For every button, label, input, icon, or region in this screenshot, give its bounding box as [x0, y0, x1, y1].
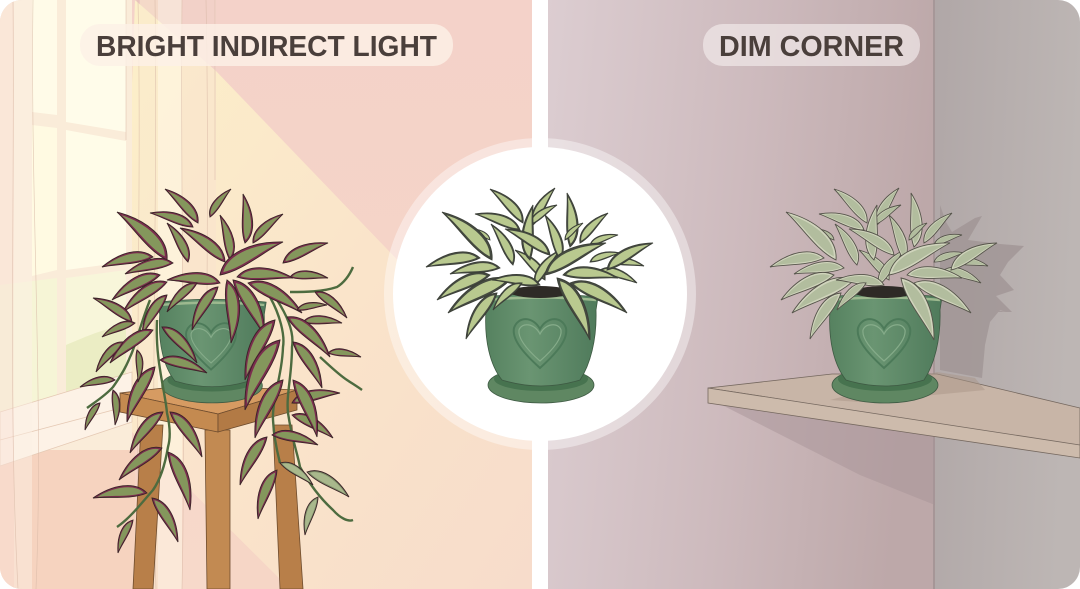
- faded pot: [828, 294, 942, 403]
- photo pot: [484, 294, 598, 403]
- green pot with heart: [158, 299, 266, 403]
- corner shelf: [708, 372, 1080, 458]
- label: dim corner: [703, 24, 920, 66]
- photo plant foliage: [424, 183, 654, 341]
- curtains: [0, 0, 216, 589]
- plant: purple-edged trailing plant: [79, 183, 362, 554]
- plant wall shadow: [940, 205, 1024, 378]
- shelf shadow: [722, 405, 935, 505]
- stand: wooden plant stool: [120, 385, 303, 589]
- plant: pale plant in dim corner: [768, 183, 998, 403]
- trailing stems: [87, 267, 362, 527]
- label: bright indirect light: BRIGHT INDIRECT LIGHT: [96, 31, 437, 63]
- window: [0, 0, 132, 466]
- center circle: reference plant: [384, 138, 696, 450]
- foliage: [79, 183, 362, 554]
- panel: bright indirect light background: [0, 0, 532, 589]
- faded foliage: [768, 183, 998, 341]
- panel: dim corner background: [548, 0, 1080, 589]
- label: dim corner: DIM CORNER: [719, 31, 904, 63]
